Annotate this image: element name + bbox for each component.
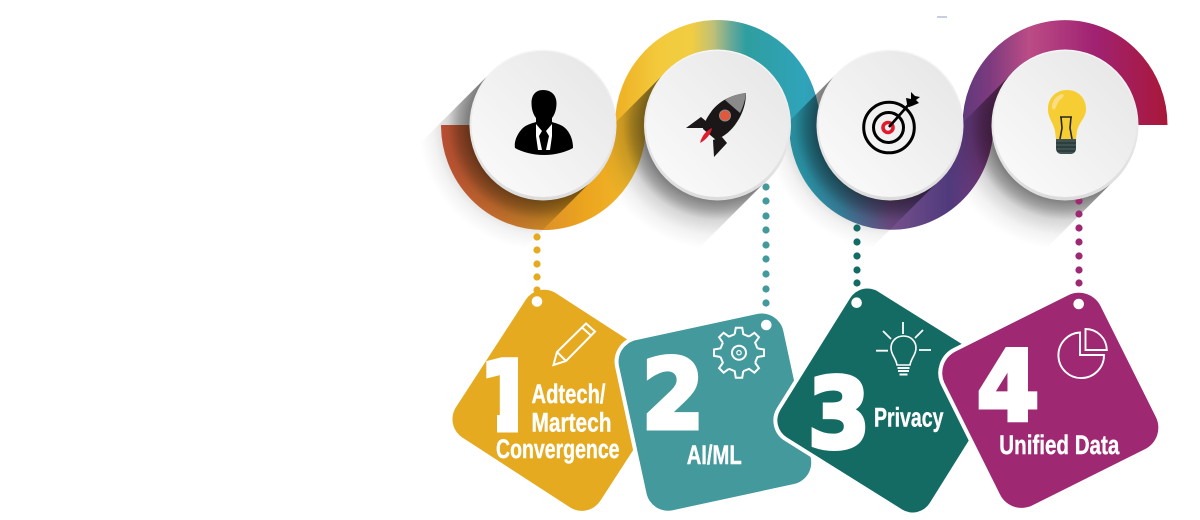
icon: idea bulb <box>876 322 931 374</box>
ribbon: winding multicolour band <box>456 35 1152 215</box>
hanging hole <box>761 320 772 330</box>
dotted connector 2 <box>762 183 770 307</box>
icon: yellow light bulb <box>1048 90 1086 154</box>
circle shadows <box>399 73 1117 269</box>
hanging hole <box>532 296 542 307</box>
card 4 label: Unified Data <box>999 430 1120 460</box>
icon: gear <box>714 328 764 378</box>
card 2: AI/ML <box>614 309 815 515</box>
number 2: 2 <box>642 339 704 451</box>
icon: businessman <box>515 90 573 155</box>
card 1: Adtech/Martech Convergence <box>452 290 633 511</box>
card 1 label: Convergence <box>496 434 620 464</box>
card 4: Unified Data <box>934 285 1167 516</box>
dotted connector 1 <box>533 233 541 294</box>
icon: pie chart <box>1058 329 1107 378</box>
dotted connector 4 <box>1075 197 1083 287</box>
small mark above ribbon <box>937 16 947 18</box>
card 1 label: Martech <box>532 408 612 438</box>
dotted connector 3 <box>853 224 861 287</box>
card 3 label: Privacy <box>874 403 944 433</box>
card 2 label: AI/ML <box>687 440 742 470</box>
number 4: 4 <box>977 331 1039 443</box>
circle 3 with target icon <box>816 50 964 200</box>
card 1 label: Adtech/ <box>532 379 606 409</box>
circle 4 with light bulb icon <box>992 50 1138 200</box>
card 1 label <box>496 379 620 464</box>
card 3: Privacy <box>770 281 1010 520</box>
number 1: 1 <box>480 341 534 453</box>
icon: pencil <box>554 324 595 365</box>
icon: rocket <box>686 93 746 157</box>
icon: target with arrow <box>864 92 920 153</box>
circle 1 with person icon <box>470 50 616 200</box>
hanging hole <box>851 297 862 308</box>
number 3: 3 <box>808 358 870 470</box>
hanging hole <box>1073 299 1084 309</box>
circle 2 with rocket icon <box>644 50 791 200</box>
